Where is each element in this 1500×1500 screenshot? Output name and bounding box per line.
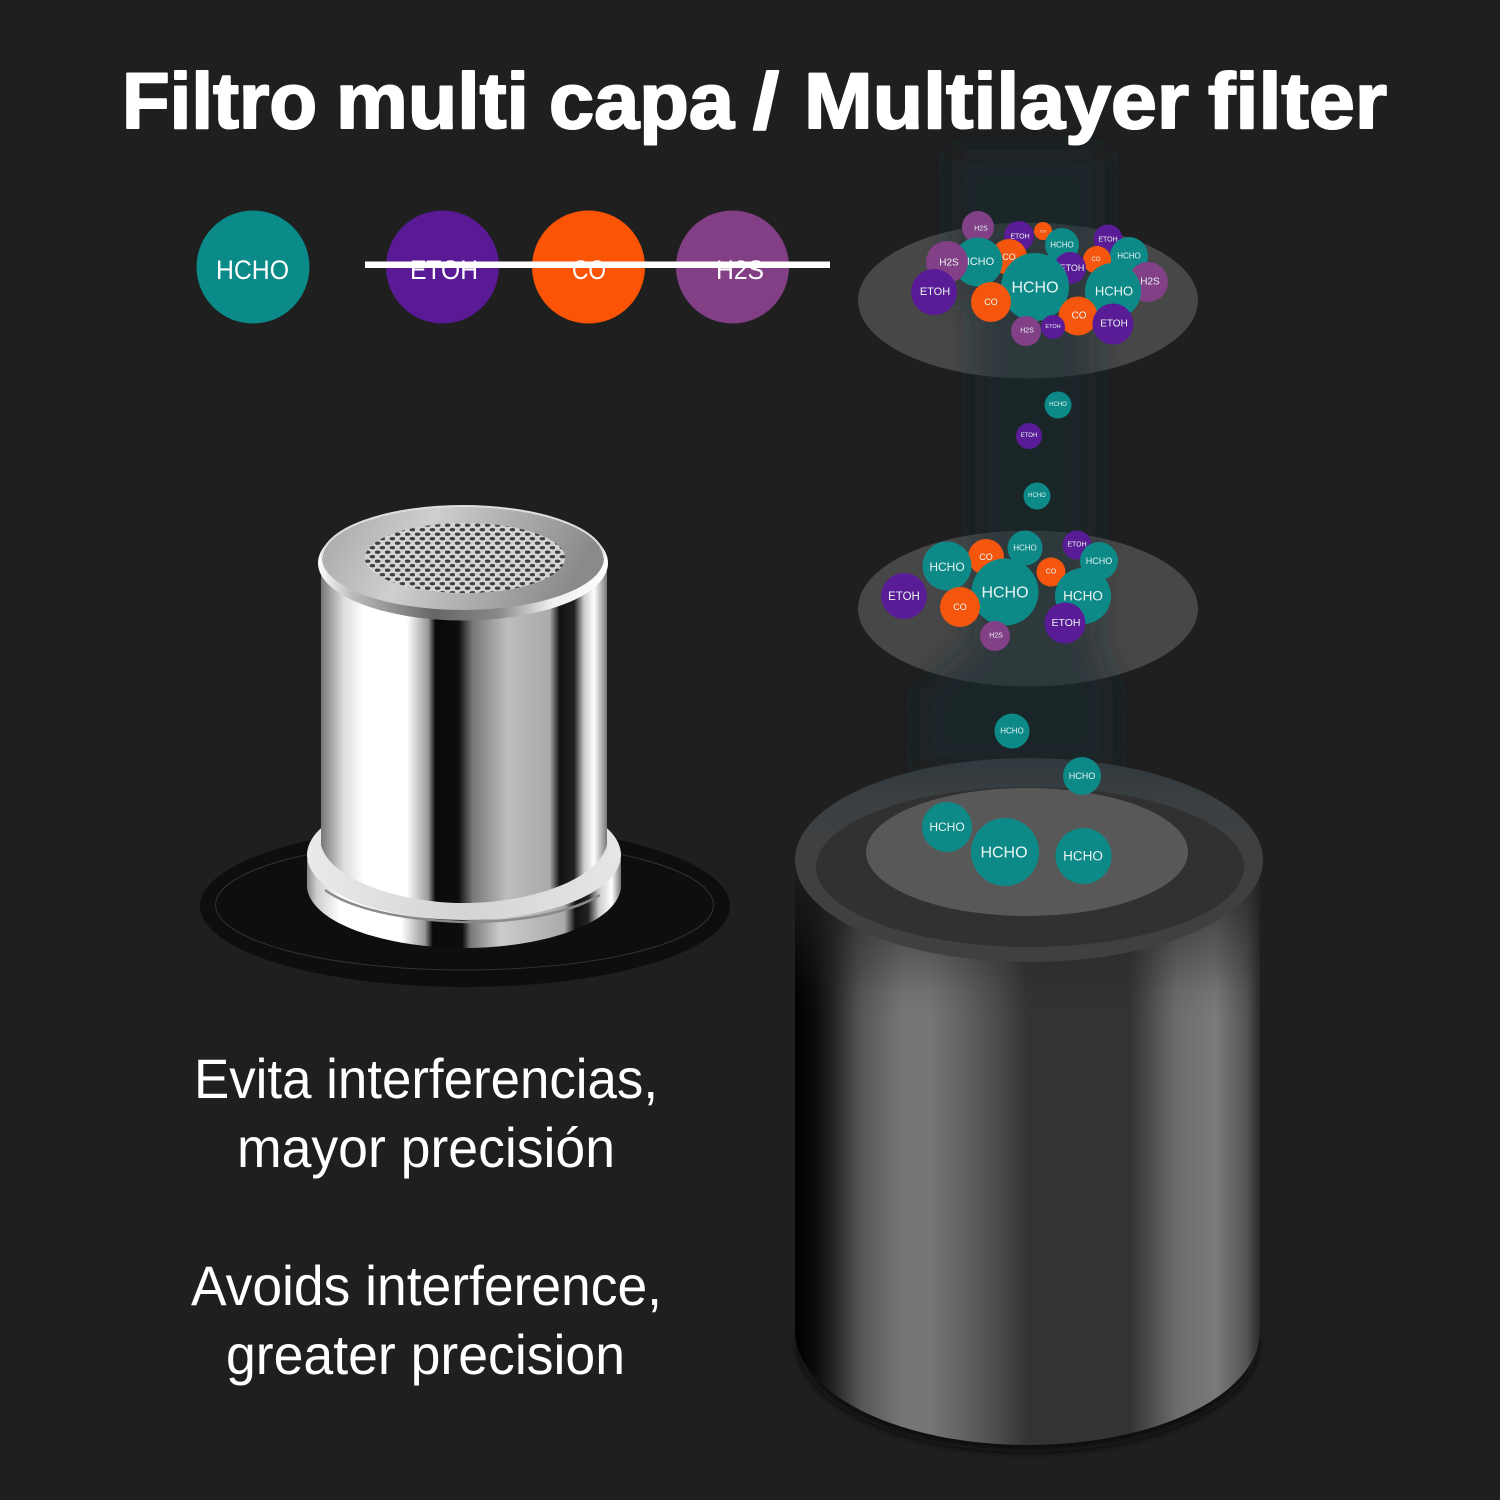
legend circle: H2S xyxy=(676,210,789,324)
molecule: CO: CO xyxy=(984,297,998,307)
molecule: HCHO xyxy=(954,238,1002,286)
black filter cartridge xyxy=(795,758,1263,1452)
molecule: CO: CO xyxy=(979,552,993,562)
cartridge body xyxy=(795,860,1260,1445)
molecule: HCHO: HCHO xyxy=(1095,284,1133,298)
English caption xyxy=(191,1254,662,1386)
title: Multilayer xyxy=(804,56,1189,145)
molecule: H2S xyxy=(926,241,968,283)
filter disc: middle xyxy=(858,530,1198,686)
molecule: HCHO xyxy=(1080,542,1118,580)
molecule: HCHO: HCHO xyxy=(1011,280,1059,296)
title xyxy=(122,56,1387,145)
molecule: H2S: H2S xyxy=(1140,276,1160,288)
molecule: ETOH xyxy=(1004,221,1034,251)
molecule: HCHO xyxy=(971,818,1039,886)
title: Filtro xyxy=(122,56,317,145)
legend circle: CO xyxy=(532,210,645,324)
molecule: H2S: H2S xyxy=(939,258,959,268)
molecule: HCHO: HCHO xyxy=(962,256,995,268)
molecule: HCHO: HCHO xyxy=(929,560,965,574)
Spanish caption: mayor precisión xyxy=(237,1116,615,1179)
molecule: H2S: H2S xyxy=(1020,328,1034,334)
floor shadow xyxy=(200,825,730,987)
molecule: CO xyxy=(968,539,1004,575)
molecule: HCHO: HCHO xyxy=(1013,544,1037,552)
molecule: ETOH: ETOH xyxy=(1021,433,1037,439)
molecule: ETOH: ETOH xyxy=(1052,617,1080,629)
molecule: ETOH: ETOH xyxy=(1098,236,1118,244)
molecule: CO: CO xyxy=(1092,257,1101,263)
molecule: HCHO xyxy=(994,714,1030,748)
molecule: HCHO xyxy=(1055,568,1111,624)
cartridge ground shadow xyxy=(798,1236,1258,1452)
molecule: HCHO xyxy=(1045,228,1079,262)
molecule: ETOH: ETOH xyxy=(888,591,920,603)
molecule: ETOH xyxy=(1094,224,1122,254)
light beam behind molecules xyxy=(920,150,1113,770)
floor ring xyxy=(216,840,714,970)
molecule: CO xyxy=(1083,246,1111,274)
legend circle: HCHO xyxy=(196,210,310,324)
title: multi xyxy=(336,56,529,145)
English caption: greater precision xyxy=(226,1323,625,1386)
molecule: H2S xyxy=(1011,316,1041,346)
flange side xyxy=(307,860,621,948)
molecule: HCHO: HCHO xyxy=(980,844,1028,862)
molecule: CO: CO xyxy=(1046,568,1057,576)
cap lip xyxy=(318,506,608,620)
molecule: HCHO xyxy=(1001,253,1069,321)
molecule: ETOH: ETOH xyxy=(920,286,950,298)
molecule: CO xyxy=(940,587,980,627)
molecule: ETOH xyxy=(1041,315,1065,339)
title: capa xyxy=(549,56,735,145)
molecule: HCHO xyxy=(1008,530,1042,566)
molecule: ETOH: ETOH xyxy=(1045,324,1061,330)
legend circle: CO: CO xyxy=(572,255,606,285)
molecule: HCHO xyxy=(922,542,972,590)
outer rim xyxy=(795,758,1263,962)
molecule: HCHO xyxy=(1110,237,1148,275)
molecules passing into cartridge xyxy=(922,714,1112,886)
molecule: CO: CO xyxy=(953,602,967,612)
molecule: HCHO: HCHO xyxy=(1117,252,1141,260)
molecule: ETOH xyxy=(1044,602,1086,644)
title: / xyxy=(753,56,779,145)
molecule: HCHO xyxy=(922,802,972,852)
cap top xyxy=(322,506,604,610)
steel body xyxy=(321,565,607,903)
molecule: ETOH xyxy=(911,269,957,315)
molecule: CO xyxy=(1034,222,1052,240)
molecule: HCHO: HCHO xyxy=(1063,848,1103,864)
filter disc: upper xyxy=(858,222,1198,378)
molecule: CO: CO xyxy=(1040,228,1046,234)
middle molecules cluster xyxy=(881,530,1118,651)
molecule: ETOH: ETOH xyxy=(1100,318,1128,330)
molecule: HCHO: HCHO xyxy=(929,820,965,834)
molecule: HCHO xyxy=(1085,263,1141,319)
molecule: H2S: H2S xyxy=(989,632,1003,640)
strike-through line xyxy=(365,262,830,268)
molecule: HCHO xyxy=(1063,757,1101,795)
molecule: HCHO: HCHO xyxy=(1086,556,1112,566)
molecule: CO xyxy=(971,282,1011,322)
flange top xyxy=(307,790,621,920)
legend circle: HCHO: HCHO xyxy=(216,255,289,285)
mesh grain xyxy=(866,788,1188,916)
molecule: H2S xyxy=(962,211,994,243)
molecule: HCHO: HCHO xyxy=(1069,771,1095,781)
molecule: HCHO: HCHO xyxy=(1000,726,1024,736)
molecule: ETOH: ETOH xyxy=(1060,263,1084,273)
stainless steel filter xyxy=(200,506,730,987)
mesh surface xyxy=(866,788,1188,916)
molecule: H2S xyxy=(1128,262,1168,302)
molecule: ETOH xyxy=(1062,530,1092,560)
legend circle: H2S: H2S xyxy=(716,255,764,285)
molecule: ETOH: ETOH xyxy=(1067,542,1087,548)
molecule: ETOH xyxy=(881,573,927,619)
molecule: ETOH: ETOH xyxy=(1010,234,1030,240)
molecule: CO: CO xyxy=(1072,310,1087,322)
molecule: ETOH xyxy=(1054,252,1086,284)
upper molecules cluster xyxy=(911,211,1168,346)
title: filter xyxy=(1208,56,1387,145)
Spanish caption: Evita interferencias, xyxy=(194,1047,658,1110)
Spanish caption xyxy=(194,1047,658,1179)
perforated mesh xyxy=(365,523,565,593)
molecule: H2S: H2S xyxy=(974,226,988,232)
molecule: HCHO: HCHO xyxy=(1063,588,1103,604)
English caption: Avoids interference, xyxy=(191,1254,662,1317)
legend circle: ETOH: ETOH xyxy=(410,255,478,285)
legend circle: ETOH xyxy=(386,210,499,324)
molecule: HCHO xyxy=(972,558,1038,626)
flange groove xyxy=(325,890,600,922)
molecule: HCHO: HCHO xyxy=(981,584,1029,602)
molecule: HCHO xyxy=(1056,828,1112,884)
molecule: CO xyxy=(1058,296,1098,336)
molecule: CO xyxy=(1036,558,1066,586)
molecule: HCHO: HCHO xyxy=(1050,240,1074,250)
molecule: HCHO: HCHO xyxy=(1028,493,1046,499)
falling molecules between layers xyxy=(1016,392,1072,510)
legend: gas molecules xyxy=(196,210,830,324)
molecule: H2S xyxy=(980,621,1010,651)
molecule: CO xyxy=(991,239,1027,275)
molecule: HCHO: HCHO xyxy=(1049,402,1067,408)
molecule: ETOH xyxy=(1092,304,1134,344)
cartridge upper shading xyxy=(795,860,1260,1445)
inner ring xyxy=(816,787,1244,947)
cap top highlight xyxy=(322,506,604,558)
molecule: CO: CO xyxy=(1002,252,1016,262)
